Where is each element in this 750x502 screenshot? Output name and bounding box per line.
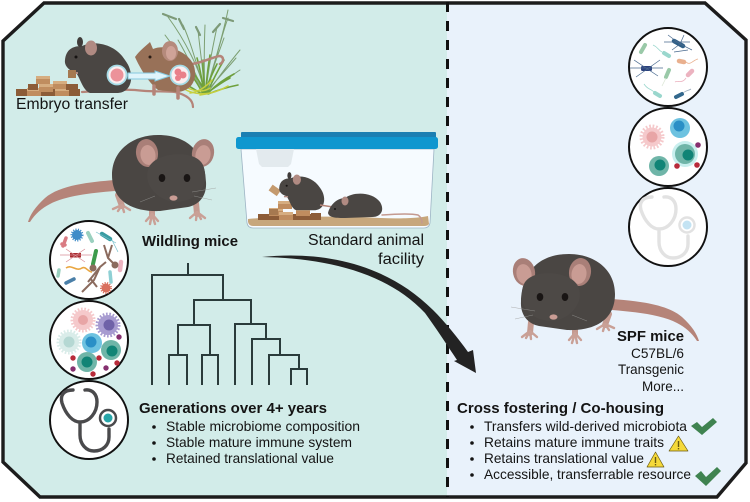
lid bbox=[241, 132, 436, 138]
arrow: curved transfer arrow bbox=[262, 256, 476, 373]
text: SPF mice bbox=[617, 328, 684, 394]
text: Generations list: Stable microbiome composition bbox=[166, 418, 360, 434]
icon: wildling stethoscope circle bbox=[50, 381, 128, 459]
illustration: SPF mouse bbox=[510, 254, 699, 343]
water pouch bbox=[256, 149, 294, 167]
icon: wildling microbiome circle bbox=[50, 221, 128, 299]
illustration: embryo transfer bbox=[16, 10, 240, 107]
icon: warning 2 bbox=[647, 452, 664, 467]
icon: green check 1 bbox=[691, 418, 717, 435]
microbes bbox=[630, 35, 698, 97]
text: SPF mice: More... bbox=[642, 378, 684, 394]
wood blocks bbox=[16, 76, 80, 96]
immune cells bbox=[642, 118, 701, 176]
divider dashed line bbox=[446, 2, 449, 497]
illustration: wildling mouse bbox=[28, 135, 217, 224]
text: Cross fostering list: Cross fostering / Co-housing bbox=[457, 400, 664, 417]
text: Cross fostering list: Retains mature immune traits bbox=[484, 434, 664, 450]
panel: SPF background bbox=[447, 3, 746, 497]
text: Standard animal facility bbox=[308, 232, 424, 268]
panel: wildling background bbox=[3, 3, 447, 497]
dark mouse bbox=[65, 37, 131, 93]
text: SPF mice: Transgenic bbox=[618, 361, 684, 377]
text: SPF mice: C57BL/6 bbox=[631, 345, 684, 361]
immune cells bbox=[59, 310, 122, 377]
icon: warning 1 bbox=[669, 436, 688, 451]
text: Generations list bbox=[139, 400, 360, 466]
text: Cross fostering list: Transfers wild-derived microbiota bbox=[484, 418, 687, 434]
text: Standard animal facility: facility bbox=[378, 251, 424, 268]
text: Cross fostering list: Accessible, transferrable resource bbox=[484, 466, 691, 482]
grass bbox=[163, 10, 240, 95]
tails bbox=[82, 90, 193, 107]
text: Cross fostering list bbox=[457, 400, 691, 482]
text: SPF mice: SPF mice bbox=[617, 328, 684, 345]
embryo right bbox=[170, 66, 190, 84]
text: Generations list: Retained translational value bbox=[166, 450, 334, 466]
icon: SPF stethoscope circle bbox=[629, 188, 707, 266]
text: Cross fostering list: Retains translational value bbox=[484, 450, 644, 466]
mouse two bbox=[328, 194, 422, 223]
microbes bbox=[58, 230, 121, 292]
transfer arrow bbox=[128, 71, 170, 81]
bedding bbox=[248, 216, 429, 226]
cage body bbox=[241, 149, 434, 228]
text: Generations list: Generations over 4+ years bbox=[139, 400, 327, 417]
icon: SPF microbiome circle bbox=[629, 28, 707, 106]
blocks bbox=[258, 185, 321, 220]
icon: green check 2 bbox=[695, 467, 721, 486]
text: Wildling mice: Wildling mice bbox=[142, 233, 238, 250]
mouse one bbox=[279, 172, 324, 210]
brown mouse bbox=[135, 42, 195, 92]
text: Standard animal facility: Standard animal bbox=[308, 232, 424, 249]
illustration: animal cage bbox=[236, 132, 438, 228]
embryo left bbox=[108, 66, 126, 84]
chart: generations tree bbox=[152, 263, 307, 385]
icon: wildling immune cells circle bbox=[50, 301, 128, 379]
icon: SPF immune cells circle bbox=[629, 108, 707, 186]
text: Generations list: Stable mature immune system bbox=[166, 434, 352, 450]
text: Embryo transfer: Embryo transfer bbox=[16, 96, 128, 113]
